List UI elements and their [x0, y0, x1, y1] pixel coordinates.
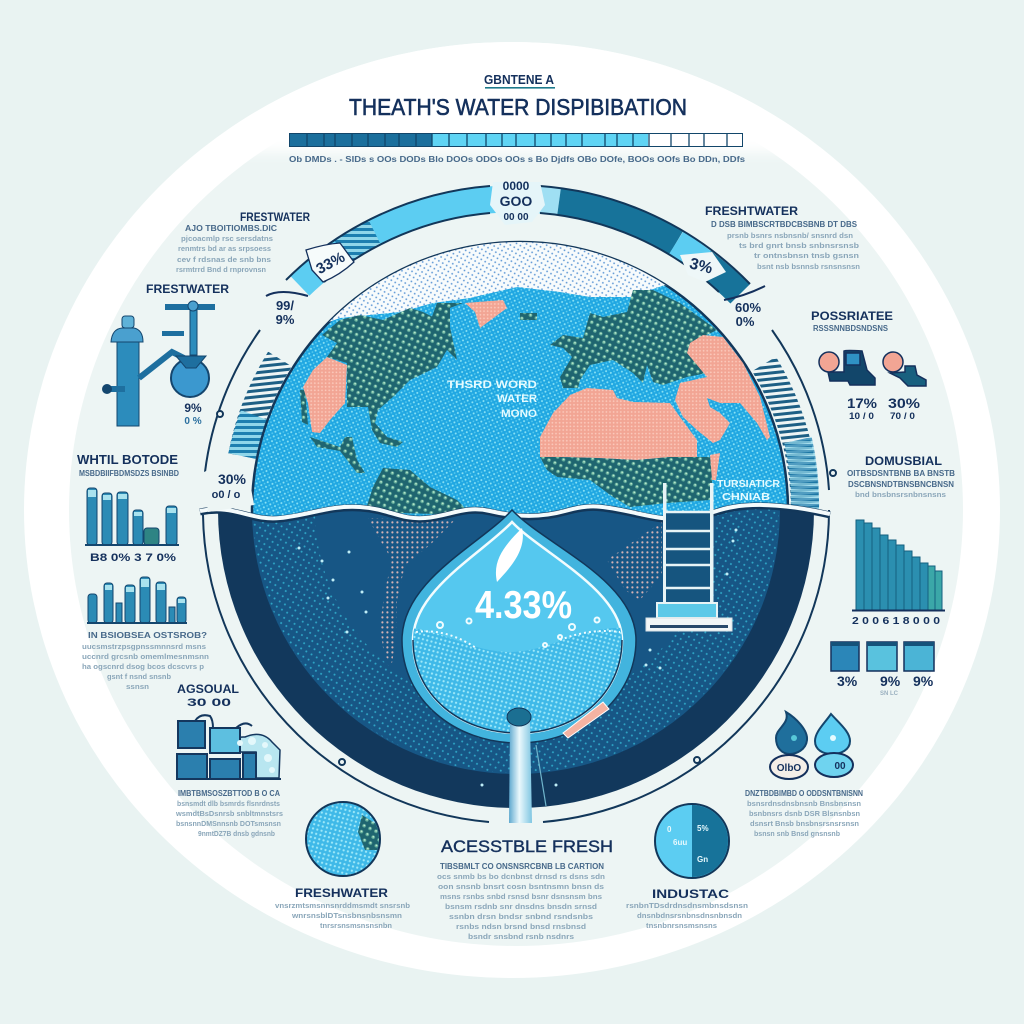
bar chart	[85, 488, 179, 545]
thin outer arc	[203, 330, 836, 822]
descending bar chart	[852, 520, 945, 627]
icon: tanks and bubbles	[177, 715, 281, 779]
note text: OITBSDSNTBNB BA BNSTB	[847, 469, 955, 478]
arc outlines	[286, 186, 750, 292]
side map label	[717, 479, 781, 503]
panel note: bsnsmdt dlb bsmrds flsnrdnsts	[177, 801, 280, 808]
panel note: IMBTBMSOSZBTTOD B O CA	[178, 789, 280, 798]
heading: POSSRIATEE	[811, 309, 893, 323]
note text	[176, 224, 277, 274]
note text: tr ontnsbnsn tnsb gsnsn	[754, 253, 859, 260]
pie chart: 0	[667, 825, 672, 834]
drop water dots	[413, 628, 622, 732]
west coast salmon	[303, 357, 347, 433]
percent value: 4.33%	[475, 584, 572, 627]
percent tags on arc	[204, 179, 765, 512]
side map label: TURSIATICR	[717, 479, 781, 490]
note text: AJO TBOITIOMBS.DIC	[185, 224, 277, 233]
note text: DNZTBDBIMBD O ODDSNTBNISNN	[745, 789, 863, 798]
tag: 3 percent	[680, 252, 726, 282]
central america	[310, 437, 365, 473]
tag: top cluster: GOO	[500, 193, 532, 209]
box percentages	[837, 673, 934, 689]
drop interior	[413, 522, 622, 733]
chart note: ha ogscnrd dsog bcos dcscvrs p	[82, 664, 204, 671]
heading: FRESTWATER	[146, 282, 229, 296]
panel: water drops	[745, 712, 863, 838]
polar dotted fade	[329, 242, 668, 322]
tag: top cluster: 0000	[503, 179, 530, 193]
heading: AGSOUAL	[177, 682, 239, 696]
body text: TIBSBMLT CO ONSNSRCBNB LB CARTION	[440, 862, 604, 871]
north america	[322, 303, 463, 447]
percent 17: 17%	[847, 395, 878, 411]
panel: industrial pie	[626, 804, 748, 930]
tag: 30 percent: 30%	[218, 471, 247, 487]
map label	[447, 379, 537, 420]
subheading: MSBDBIIFBDMSDZS BSINBD	[79, 469, 179, 478]
subheading: 30 00	[187, 697, 231, 709]
faucet pipe	[509, 722, 532, 823]
note text: vnsrzmtsmsnnsnrddmsmdt snsrsnb	[275, 903, 410, 910]
main title: THEATH'S WATER DISPIBIBATION	[349, 94, 687, 120]
box three	[904, 642, 934, 671]
tag: 30 percent: o0 / o	[212, 489, 241, 501]
note text: dnsnbdnsrsnbnsdnsnbnsdn	[637, 913, 742, 920]
progress bar caption: Ob DMDs . - SIDs s OOs DODs Blo DOOs ODOs OOs s Bo Djdfs OBo DOfe, BOOs OOfs Bo DDn, DDfs	[289, 155, 746, 164]
icon: faucet and flask	[102, 301, 215, 426]
note text	[626, 903, 748, 930]
panel note: 9nmtDZ7B dnsb gdnsnb	[198, 831, 275, 838]
south america outline	[368, 518, 455, 663]
drop bubbles fringe	[416, 618, 620, 648]
body text: ssnbn drsn bndsr snbnd rsndsnbs	[449, 914, 593, 921]
box two	[867, 642, 897, 671]
note text: D DSB BIMBSCRTBDCBSBNB DT DBS	[711, 220, 858, 229]
body text: oon snsnb bnsrt cosn bsntnsmn bnsn ds	[438, 884, 604, 891]
chart labels: B8 0% 3 7 0%	[90, 552, 176, 564]
heading: ACESSTBLE FRESH	[441, 837, 613, 856]
tag: 33 percent	[306, 243, 354, 282]
panel: accessible fresh	[437, 837, 613, 941]
storage boxes	[831, 642, 934, 697]
north africa	[540, 388, 697, 460]
tag: 60 percent	[724, 286, 765, 329]
panel: freshwater globe	[275, 802, 410, 930]
drop highlight	[496, 528, 523, 582]
icon: vehicle	[883, 352, 926, 386]
percent 17 second line: 10 / 0	[849, 411, 874, 421]
tag: 33 percent: 33%	[313, 249, 348, 278]
note text: cev f rdsnas de snb bns	[177, 257, 271, 264]
ladder and platform	[646, 483, 732, 631]
panel: possible uses	[811, 309, 926, 421]
note text	[711, 220, 860, 271]
note text: ts brd gnrt bnsb snbnsrsnsb	[739, 243, 859, 250]
note text: dsnsrt Bnsb bnsbnsrsnsrsnsn	[750, 821, 859, 828]
tag: 99 percent: 9%	[276, 312, 295, 327]
map label: MONO	[501, 408, 537, 420]
note text: DSCBNSNDTBNSBNCBNSN	[848, 480, 954, 489]
bars	[856, 520, 942, 610]
percent: 9%	[184, 401, 202, 415]
note text	[847, 469, 955, 499]
panel: second bar chart	[82, 577, 209, 691]
note text: tnsnbnrsnsmsnsns	[646, 923, 717, 930]
title backing	[261, 74, 771, 152]
percent 30: 30%	[888, 395, 921, 411]
box percentages: 9%	[913, 673, 934, 689]
pie chart: 5%	[697, 824, 709, 833]
map label: WATER	[497, 393, 537, 405]
lower inner outline	[413, 640, 622, 733]
tag: 99 percent: 99/	[276, 298, 294, 313]
pie chart: Gn	[697, 855, 708, 864]
eyebrow underline	[485, 87, 555, 89]
body text: rsnbs ndsn brsnd bnsd rnsbnsd	[456, 924, 586, 931]
panel note: bsnsnnDMSnnsnb DOTsmsnsn	[176, 821, 281, 828]
icon: mini globe	[306, 802, 380, 876]
note text: rsnbnTDsdrdnsdnsmbnsdsnsn	[626, 903, 748, 910]
tag: 60 percent: 60%	[735, 300, 761, 315]
central africa	[540, 457, 713, 507]
body text	[437, 862, 605, 941]
faucet collar	[507, 708, 531, 726]
ocean dot ring	[254, 510, 779, 773]
heading: DOMUSBIAL	[865, 454, 942, 468]
side map label: CHNIAB	[722, 492, 770, 503]
chart note: uccnrd grcsnb omemlmesnmsnn	[82, 654, 209, 661]
heading: INDUSTAC	[652, 887, 729, 901]
chart note: ssnsn	[126, 684, 149, 691]
note text: bnd bnsbnsrsnbnsnsns	[855, 492, 946, 499]
asia salmon	[675, 335, 770, 443]
note text: bsnt nsb bsnnsb rsnsnsnsn	[757, 264, 860, 271]
note text: prsnb bsnrs nsbnsnb/ snsnrd dsn	[727, 233, 853, 240]
central water drop	[402, 510, 636, 823]
globe: lower dark hemisphere	[218, 509, 814, 808]
tag: 99 percent	[266, 292, 308, 327]
greenland	[465, 300, 507, 328]
body text: bsndr snsbnd rsnb nsdnrs	[468, 934, 574, 941]
box one	[831, 642, 859, 671]
heading: FRESHWATER	[295, 886, 388, 900]
panel: domestic	[847, 454, 955, 499]
small islands	[520, 313, 537, 320]
icon: dark drop: OlbO	[777, 763, 801, 774]
box percentages: 9%	[880, 673, 901, 689]
star dots	[298, 528, 738, 786]
chart note: gsnt f nsnd snsnb	[107, 674, 171, 681]
segmented progress bar	[289, 133, 743, 147]
continents	[300, 290, 770, 515]
icon: light drop: 00	[834, 761, 846, 772]
heading: FRESTWATER	[240, 210, 310, 224]
bar chart	[87, 577, 187, 623]
heading: FRESHTWATER	[705, 204, 798, 218]
subheading: RSSSNNBDSNDSNS	[813, 324, 889, 333]
panel: top-left fresh water note	[176, 210, 310, 274]
note text: wnrsnsblDTsnsbnsnbsnsmn	[291, 913, 402, 920]
chart note: uucsmstrzpsgpnssmnnsrd msns	[82, 644, 206, 651]
south america top	[367, 468, 465, 514]
note text: tnrsrsnsmsnsnsnbn	[320, 923, 392, 930]
panel: well storage	[77, 452, 179, 564]
tag: 60 percent: 0%	[736, 314, 755, 329]
heading: WHTIL BOTODE	[77, 452, 178, 467]
map label: THSRD WORD	[447, 379, 537, 391]
note text: bsnsn snb Bnsd gnsnsnb	[754, 831, 840, 838]
title block	[349, 72, 687, 120]
note text: bsnsrdnsdnsbnsnb Bnsbnsnsn	[747, 801, 861, 808]
body text: ocs snmb bs bo dcnbnst drnsd rs dsns sdn	[437, 874, 605, 881]
tag: 30 percent	[204, 467, 254, 512]
axis labels: 2 0 0 6 1 8 0 0 0	[852, 616, 941, 627]
panel: top-right fresh water note	[705, 204, 860, 271]
panel: agricultural	[175, 682, 283, 838]
chart note: IN BSIOBSEA OSTSROB?	[88, 631, 207, 640]
percent second line: 0 %	[184, 416, 202, 427]
box caption: SN LC	[880, 691, 899, 697]
axis	[852, 610, 945, 612]
box percentages: 3%	[837, 673, 858, 689]
ocean	[252, 242, 788, 778]
percent 30 second line: 70 / 0	[890, 411, 915, 421]
panel note: wsmdtBsDsnrsb snbltmnstsrs	[175, 811, 283, 818]
tag: top cluster: 00 00	[503, 212, 529, 223]
note text	[745, 789, 863, 838]
striped side bands	[242, 359, 805, 510]
chart note	[82, 631, 209, 691]
panel: freshwater faucet	[102, 282, 229, 427]
globe: upper hemisphere	[250, 240, 790, 516]
pie chart	[655, 804, 729, 878]
wave surface line	[200, 505, 830, 520]
note text	[275, 903, 410, 930]
note text: rsrmtrrd Bnd d rnprovnsn	[176, 267, 266, 274]
pie chart: 6uu	[673, 838, 687, 847]
africa speckle	[607, 522, 662, 600]
pipe shadow line	[536, 745, 546, 806]
eurasia	[550, 290, 717, 388]
note text: pjcoacmlp rsc sersdatns	[181, 236, 273, 243]
body text: bsnsm rsdnb snr dnsdns bnsdn srnsd	[445, 904, 597, 911]
tag: top cluster	[490, 179, 545, 225]
top arc band	[300, 199, 740, 294]
inner circular panel	[69, 74, 963, 946]
east africa tip	[710, 453, 720, 480]
eyebrow label: GBNTENE A	[484, 72, 555, 87]
body text: msns rsnbs snbd rsnsd bsnr dsnsnsm bns	[440, 894, 602, 901]
panel note	[175, 789, 283, 838]
salmon rim accent	[563, 702, 609, 738]
note text: renmtrs bd ar as srpsoess	[178, 246, 271, 253]
icon: truck	[819, 350, 875, 385]
drop rim	[402, 510, 636, 743]
note text: bsnbnsrs dsnb DSR Blsnsnbsn	[749, 811, 860, 818]
west coast green strip	[300, 390, 308, 425]
tag: 3 percent: 3%	[688, 255, 714, 278]
